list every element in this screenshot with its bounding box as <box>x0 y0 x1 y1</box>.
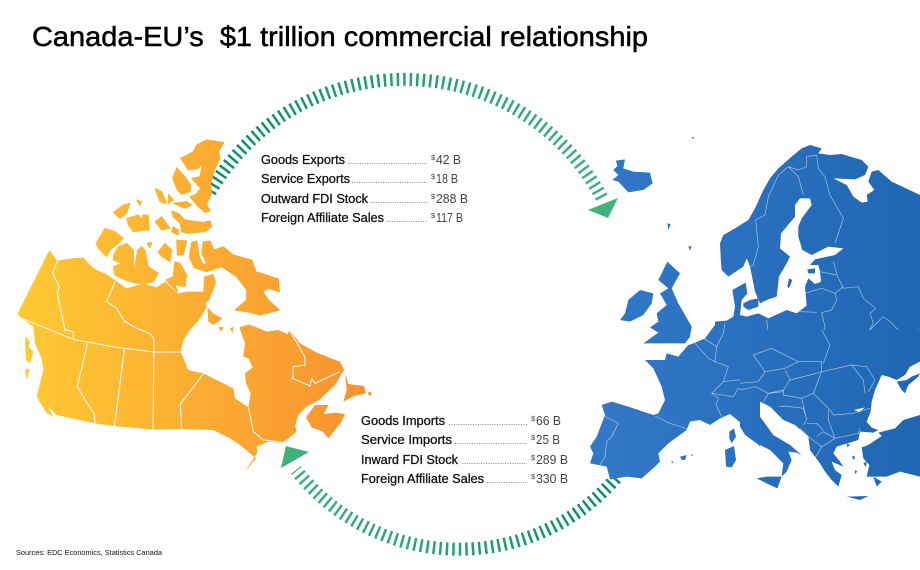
row: foreign affiliate sales (imports): Foreign Affiliate Sales <box>361 471 484 486</box>
row: foreign affiliate sales (imports): $ <box>531 472 536 481</box>
row: service exports <box>261 171 458 186</box>
row: outward FDI stock <box>261 191 468 206</box>
row: goods imports: Goods Imports <box>361 413 445 428</box>
row: service imports: 25 B <box>536 432 560 447</box>
Vancouver Island <box>37 398 53 417</box>
row: service exports: Service Exports <box>261 171 350 186</box>
map: Canada <box>17 140 372 472</box>
row: service exports: $ <box>431 172 436 181</box>
exports table <box>261 152 468 225</box>
row: goods exports: Goods Exports <box>261 152 345 167</box>
northern borders <box>747 155 920 337</box>
imports table <box>361 413 568 486</box>
Southampton Island <box>207 307 233 333</box>
Central Europe, Italy and Balkans <box>740 330 920 500</box>
row: goods exports: 42 B <box>436 152 461 167</box>
row: foreign affiliate sales (imports) <box>361 471 568 486</box>
dashed arc: imports <box>296 470 616 549</box>
Aegean islets <box>847 443 882 487</box>
Haida Gwaii and coastal islets <box>25 337 33 379</box>
row: foreign affiliate sales (imports): 330 B <box>536 471 568 486</box>
Sardinia <box>725 446 736 467</box>
western borders <box>600 323 760 465</box>
Atlantic specks <box>667 137 694 251</box>
row: foreign affiliate sales (exports): 117 B <box>436 210 463 225</box>
map: Europe <box>590 137 920 500</box>
row: inward FDI stock: $ <box>531 453 536 462</box>
Axel Heiberg Island <box>173 168 191 194</box>
row: service imports <box>361 432 560 447</box>
arrowhead: imports <box>281 446 309 468</box>
Crete <box>847 496 868 500</box>
Victoria Island <box>113 243 158 283</box>
Baffin Island <box>189 241 279 315</box>
row: goods imports: 66 B <box>536 413 561 428</box>
Newfoundland <box>343 373 366 402</box>
Turkey <box>862 415 920 477</box>
row: service imports: Service Imports <box>361 432 452 447</box>
Great Britain <box>643 262 692 343</box>
row: goods exports <box>261 152 461 167</box>
arrow: imports arc to Canada <box>281 446 616 549</box>
arrowhead: exports <box>588 198 618 218</box>
row: service exports: 18 B <box>436 171 458 186</box>
row: outward FDI stock: $ <box>431 192 436 201</box>
Danish islands <box>743 298 758 310</box>
dashed arc: exports <box>210 79 602 198</box>
Crimea <box>897 373 920 393</box>
Arctic Archipelago <box>96 140 279 315</box>
Canada mainland <box>17 250 344 472</box>
Prince of Wales Island <box>147 242 172 262</box>
Gotland and Saaremaa <box>787 268 815 288</box>
Iceland <box>612 159 653 192</box>
Boothia islets <box>166 262 187 292</box>
row: goods imports: $ <box>531 414 536 423</box>
Corsica <box>729 428 736 443</box>
row: inward FDI stock <box>361 452 568 467</box>
Scandinavia, Baltic and Russia <box>715 145 920 340</box>
Devon Island <box>172 211 212 233</box>
small northern islands <box>113 188 192 235</box>
row: service imports: $ <box>531 433 536 442</box>
Western Europe and Iberia <box>590 290 760 479</box>
row: inward FDI stock: Inward FDI Stock <box>361 452 458 467</box>
source note: Sources: EDC Economics, Statistics Canada <box>16 548 163 557</box>
row: goods exports: $ <box>431 153 436 162</box>
Ellesmere Island <box>181 140 224 212</box>
title: Canada-EU’s $1 trillion commercial relationship <box>32 21 648 52</box>
row: goods imports <box>361 413 561 428</box>
row: foreign affiliate sales (exports): Foreign Affiliate Sales <box>261 210 384 225</box>
row: outward FDI stock: Outward FDI Stock <box>261 191 368 206</box>
provincial borders <box>22 261 340 442</box>
central borders <box>740 330 875 458</box>
Banks Island <box>96 228 123 257</box>
Balearic Islands <box>671 454 693 463</box>
Maritimes <box>306 405 345 438</box>
row: outward FDI stock: 288 B <box>436 191 468 206</box>
Baffin lake <box>231 281 237 290</box>
row: foreign affiliate sales (exports): $ <box>431 211 436 220</box>
row: foreign affiliate sales (exports) <box>261 210 463 225</box>
Somerset Island <box>177 240 187 255</box>
Ireland <box>620 290 653 322</box>
lagoon on Romanian coast <box>854 407 865 412</box>
Sicily <box>757 477 782 488</box>
arrow: exports arc to Europe <box>210 79 618 218</box>
row: inward FDI stock: 289 B <box>536 452 568 467</box>
Cape Breton speck <box>368 392 372 396</box>
